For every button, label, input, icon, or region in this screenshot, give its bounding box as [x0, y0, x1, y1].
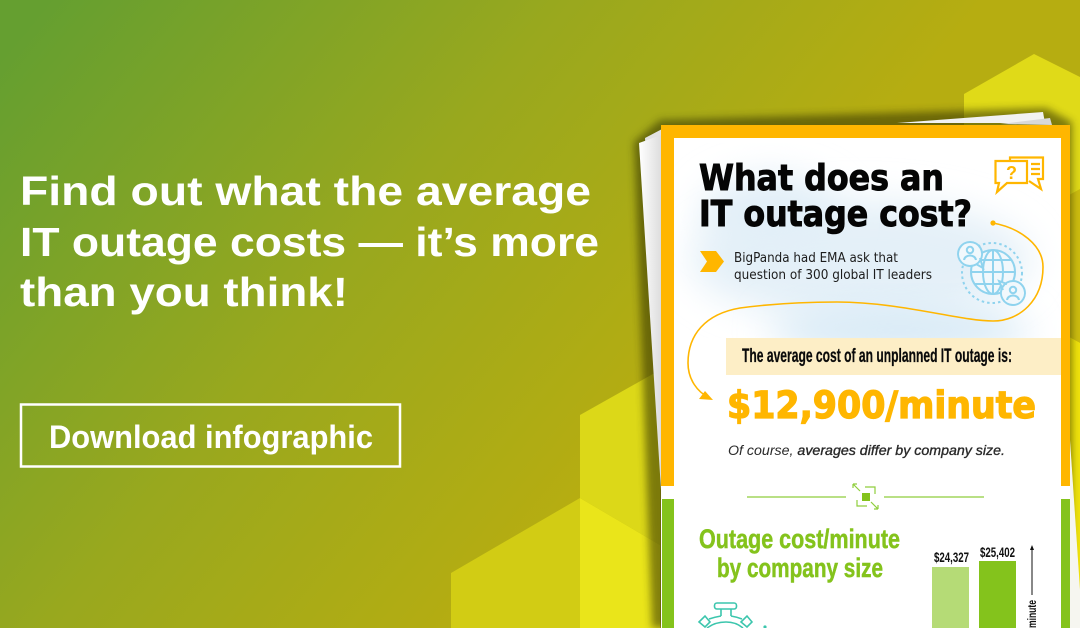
- headline: than you think!: [20, 269, 348, 315]
- green frame: [662, 499, 1070, 628]
- curved arrow: [688, 220, 1043, 400]
- icon: chat bubbles: [996, 158, 1043, 192]
- callout band: [726, 338, 1061, 375]
- icon: chevron: [700, 251, 724, 272]
- divider with icon: [747, 484, 984, 509]
- section heading: Outage cost/minute: [699, 524, 900, 554]
- button: download infographic: Download infographic: [49, 419, 373, 455]
- intro text: [734, 251, 932, 283]
- icon: chat bubbles: ?: [1006, 163, 1017, 183]
- background hexagon shapes: [451, 54, 1080, 628]
- section heading: by company size: [717, 553, 883, 583]
- button: download infographic: [21, 404, 400, 466]
- intro text: BigPanda had EMA ask that: [734, 251, 898, 266]
- headline: [20, 168, 599, 315]
- intro text: question of 300 global IT leaders: [734, 268, 932, 283]
- headline: Find out what the average: [20, 168, 591, 214]
- title: IT outage cost?: [699, 194, 972, 235]
- caption: Of course, averages differ by company size.: [728, 442, 1005, 458]
- title: What does an: [699, 158, 944, 199]
- infographic page: [661, 125, 1070, 628]
- paper stack shadow: [634, 108, 1072, 628]
- bar chart: $24,327: [934, 549, 969, 565]
- bar chart: [932, 544, 1039, 628]
- icon: globe with people: [958, 242, 1025, 305]
- orange frame: [661, 125, 1070, 486]
- bar chart: minute: [1025, 600, 1039, 628]
- headline: IT outage costs — it’s more: [20, 219, 599, 265]
- big number: $12,900/minute: [727, 384, 1036, 427]
- icon: stopwatch: [699, 603, 766, 628]
- under sheets of the paper stack: [639, 112, 1080, 628]
- bar chart: $25,402: [980, 544, 1015, 560]
- title: [699, 158, 972, 235]
- section heading: [699, 524, 900, 583]
- pale blue wash: [690, 175, 1030, 356]
